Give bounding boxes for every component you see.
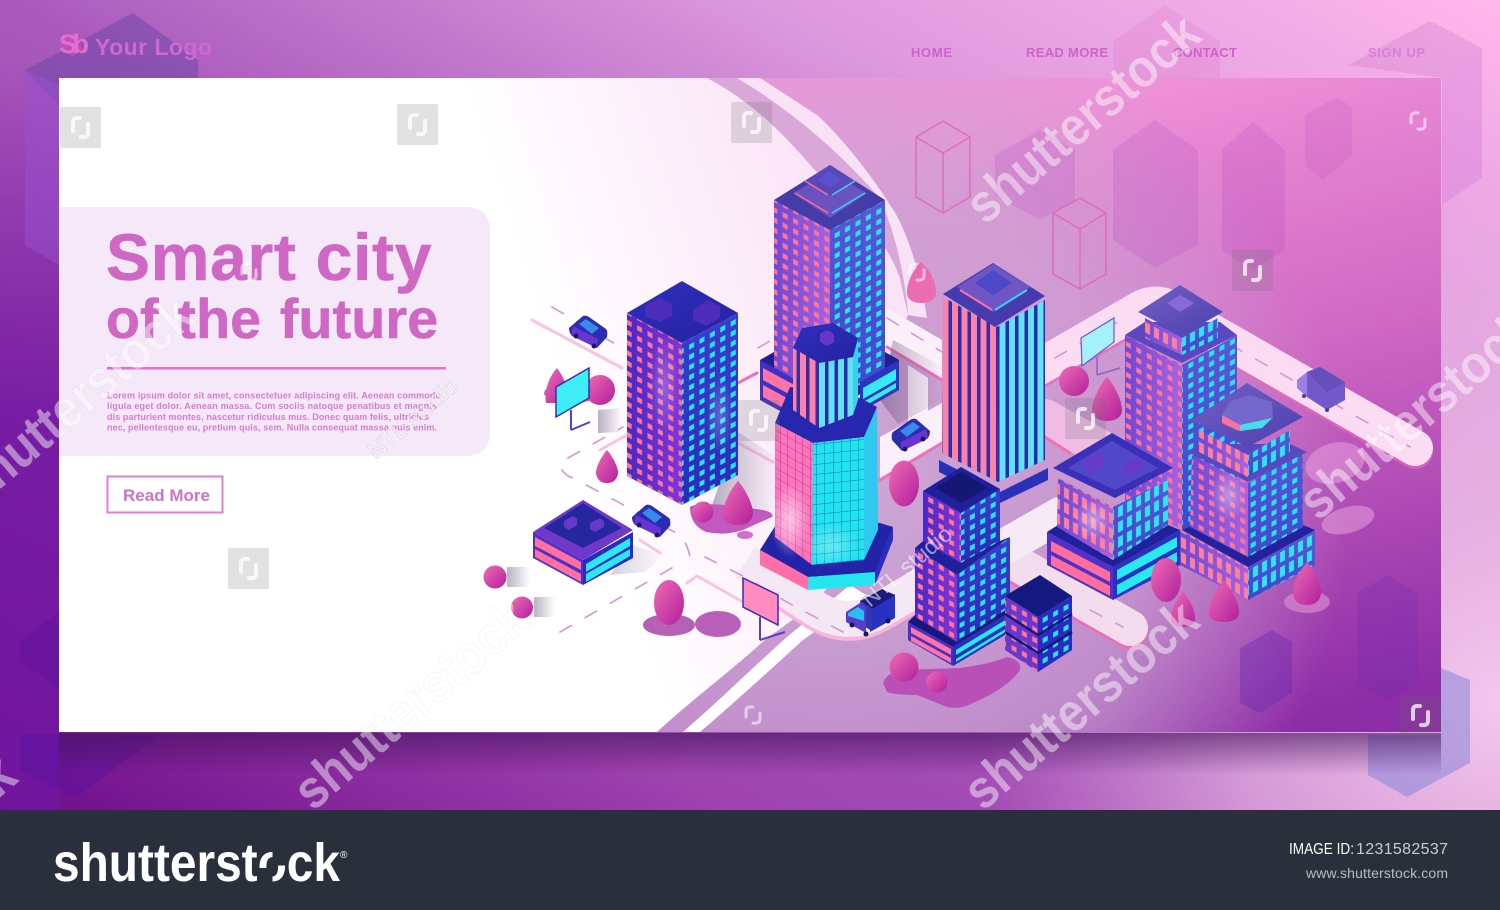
logo: Sb (59, 29, 89, 59)
upper body (793, 348, 819, 428)
cars (569, 316, 930, 538)
plant shadow blobs (544, 383, 1377, 708)
panel drop shadow (59, 733, 1441, 775)
paragraph: ligula eget dolor. Aenean massa. Cum sociis natoque penatibus et magnis (107, 401, 437, 411)
watermark: NTL studio (362, 372, 957, 612)
paragraph (107, 390, 442, 432)
lower body (775, 423, 813, 565)
building: tall back tower (760, 165, 899, 422)
footer logo: ® (340, 850, 348, 861)
footer image info: IMAGE ID: (1289, 841, 1354, 858)
footer image info: www.shutterstock.com (1305, 865, 1448, 881)
podium of tall tower (760, 352, 899, 420)
building: blue tower (627, 281, 738, 505)
navigation (911, 45, 1425, 60)
navigation: READ MORE (1026, 45, 1108, 60)
upper lilac wedge (707, 78, 908, 315)
upper curved pale band (737, 78, 927, 318)
logo (59, 29, 212, 60)
title divider (107, 367, 446, 370)
building: small left block (533, 500, 633, 585)
watermark icons (60, 102, 1441, 736)
billboard: back (1081, 318, 1120, 375)
wireframe boxes (916, 121, 1430, 386)
watermark text: shutterstock (282, 588, 540, 821)
title (106, 220, 438, 350)
roads (532, 292, 1415, 632)
building: mid right block (1047, 433, 1180, 600)
watermark text: shutterstock (952, 588, 1210, 821)
truck: navy (846, 589, 895, 636)
tree behind hex tower (907, 262, 936, 303)
footer logo: shutterstock (53, 833, 341, 893)
navigation: CONTACT (1173, 45, 1237, 60)
button: read more (108, 476, 222, 512)
main panel (59, 78, 1441, 732)
paragraph: dis parturient montes, nascetur ridiculus mus. Donec quam felis, ultricies (107, 412, 429, 422)
button: read more: Read More (123, 486, 210, 505)
trees (484, 366, 1321, 692)
logo: Your Logo (95, 34, 212, 60)
building: right back tower (1125, 285, 1237, 530)
building: front center stack (908, 467, 1010, 666)
curved white area (59, 78, 908, 732)
navigation: SIGN UP (1368, 45, 1425, 60)
white road pieces by the striped tower (860, 292, 942, 480)
title: of the future (106, 288, 438, 350)
billboard: cyan (556, 368, 590, 430)
watermark: NTL studio: NTL studio (856, 520, 957, 612)
footer image info (1289, 841, 1448, 881)
lower curved white stripe (683, 585, 866, 732)
panel: background boxes inside scene (995, 97, 1418, 713)
building: front right tower (1180, 383, 1315, 600)
title: Smart city (106, 220, 432, 294)
paragraph: nec, pellentesque eu, pretium quis, sem. Nulla consequat massa quis enim. (107, 422, 437, 432)
rounded text panel (60, 207, 490, 456)
building: small stack (1005, 575, 1072, 672)
truck: faded (1297, 367, 1345, 412)
paragraph: Lorem ipsum dolor sit amet, consectetuer adipiscing elit. Aenean commodo (107, 390, 442, 400)
footer bar (0, 810, 1500, 910)
hex base (760, 523, 893, 577)
building: striped tower (939, 263, 1048, 503)
footer image info: 1231582537 (1356, 841, 1448, 858)
ground shadows (507, 340, 942, 617)
billboard: pink (743, 578, 785, 640)
building: hexagonal tower (760, 323, 893, 590)
watermark: NTL studio: NTL studio (362, 372, 463, 464)
navigation: HOME (911, 45, 952, 60)
